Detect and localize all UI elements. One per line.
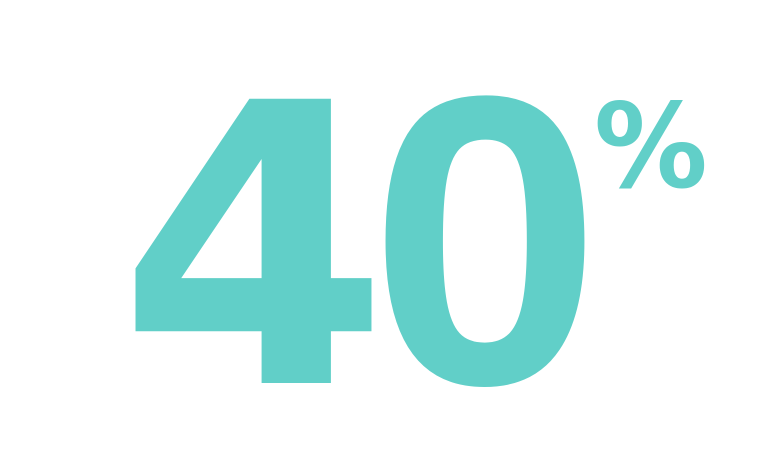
digit 4: 4 <box>118 21 389 475</box>
percent sign: % <box>594 79 708 215</box>
digit 0: 0 <box>369 10 602 470</box>
